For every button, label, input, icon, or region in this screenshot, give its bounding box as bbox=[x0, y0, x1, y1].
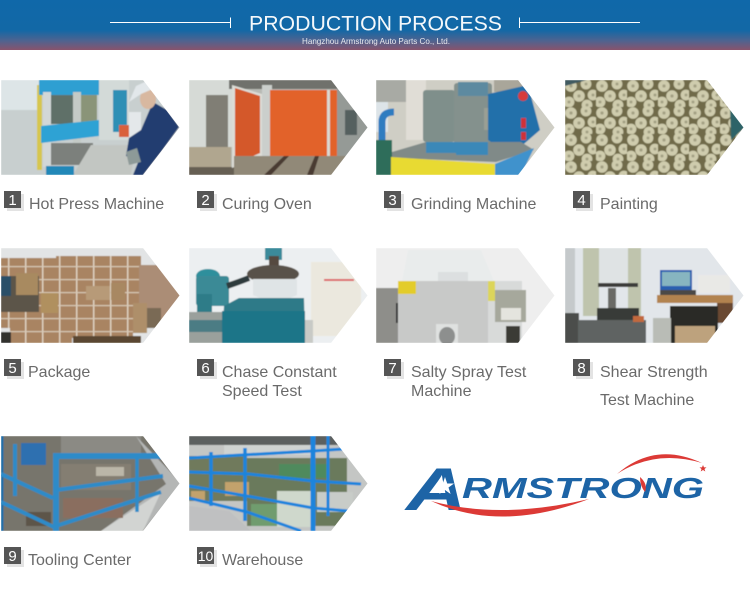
label 4: badge and caption: Painting bbox=[600, 196, 658, 213]
label 7: badge and caption: Machine bbox=[411, 383, 472, 400]
logo small star bbox=[700, 465, 706, 472]
logo star bbox=[436, 477, 454, 494]
label 6: badge and caption bbox=[197, 359, 337, 400]
label 5: badge and caption: 5 bbox=[8, 360, 17, 377]
label 1: badge and caption bbox=[4, 191, 164, 213]
label 5: badge and caption bbox=[4, 359, 90, 381]
label 3: badge and caption bbox=[384, 191, 536, 213]
label 3: badge and caption: Grinding Machine bbox=[411, 196, 536, 213]
photo 1: hot press machine bbox=[1, 80, 181, 175]
label 6: badge and caption: 6 bbox=[201, 360, 210, 377]
title: PRODUCTION PROCESS bbox=[249, 12, 502, 36]
photo 7: salty spray test machine bbox=[376, 248, 556, 345]
logo: Armstrong: RMSTRONG bbox=[462, 473, 704, 505]
label 9: badge and caption bbox=[4, 547, 132, 569]
photo 6: chase constant speed test bbox=[189, 248, 369, 343]
label 4: badge and caption bbox=[573, 191, 658, 213]
label 2: badge and caption: Curing Oven bbox=[222, 196, 312, 213]
label 7: badge and caption: Salty Spray Test bbox=[411, 364, 527, 381]
label 10: badge and caption bbox=[197, 547, 303, 569]
label 8: badge and caption: Shear Strength bbox=[600, 364, 708, 381]
photo 3: grinding machine bbox=[376, 80, 556, 175]
photo 8: shear strength test machine bbox=[565, 248, 745, 343]
photo 9: tooling center bbox=[1, 436, 181, 531]
photo 2: curing oven bbox=[189, 80, 369, 175]
photo 5: package bbox=[1, 248, 181, 343]
label 7: badge and caption bbox=[384, 359, 527, 400]
photo 10: warehouse bbox=[189, 436, 369, 531]
label 1: badge and caption: Hot Press Machine bbox=[29, 196, 164, 213]
label 8: badge and caption: Test Machine bbox=[600, 392, 694, 409]
photo 4: painting bbox=[565, 80, 745, 175]
logo lettering: A bbox=[404, 457, 467, 523]
label 6: badge and caption: Speed Test bbox=[222, 383, 302, 400]
label 8: badge and caption bbox=[573, 359, 708, 409]
logo swooshes bbox=[431, 499, 589, 517]
subtitle: Hangzhou Armstrong Auto Parts Co., Ltd. bbox=[302, 37, 450, 46]
label 1: badge and caption: 1 bbox=[8, 192, 17, 209]
label 6: badge and caption: Chase Constant bbox=[222, 364, 337, 381]
label 7: badge and caption: 7 bbox=[388, 360, 397, 377]
label 10: badge and caption: Warehouse bbox=[222, 552, 303, 569]
label 5: badge and caption: Package bbox=[28, 364, 90, 381]
label 9: badge and caption: 9 bbox=[8, 548, 17, 565]
label 4: badge and caption: 4 bbox=[577, 192, 586, 209]
label 2: badge and caption: 2 bbox=[201, 192, 210, 209]
label 3: badge and caption: 3 bbox=[388, 192, 397, 209]
header banner bbox=[0, 0, 750, 50]
logo: Armstrong bbox=[404, 454, 706, 523]
label 9: badge and caption: Tooling Center bbox=[28, 552, 132, 569]
label 10: badge and caption: 10 bbox=[198, 548, 213, 564]
label 2: badge and caption bbox=[197, 191, 312, 213]
label 8: badge and caption: 8 bbox=[577, 360, 586, 377]
